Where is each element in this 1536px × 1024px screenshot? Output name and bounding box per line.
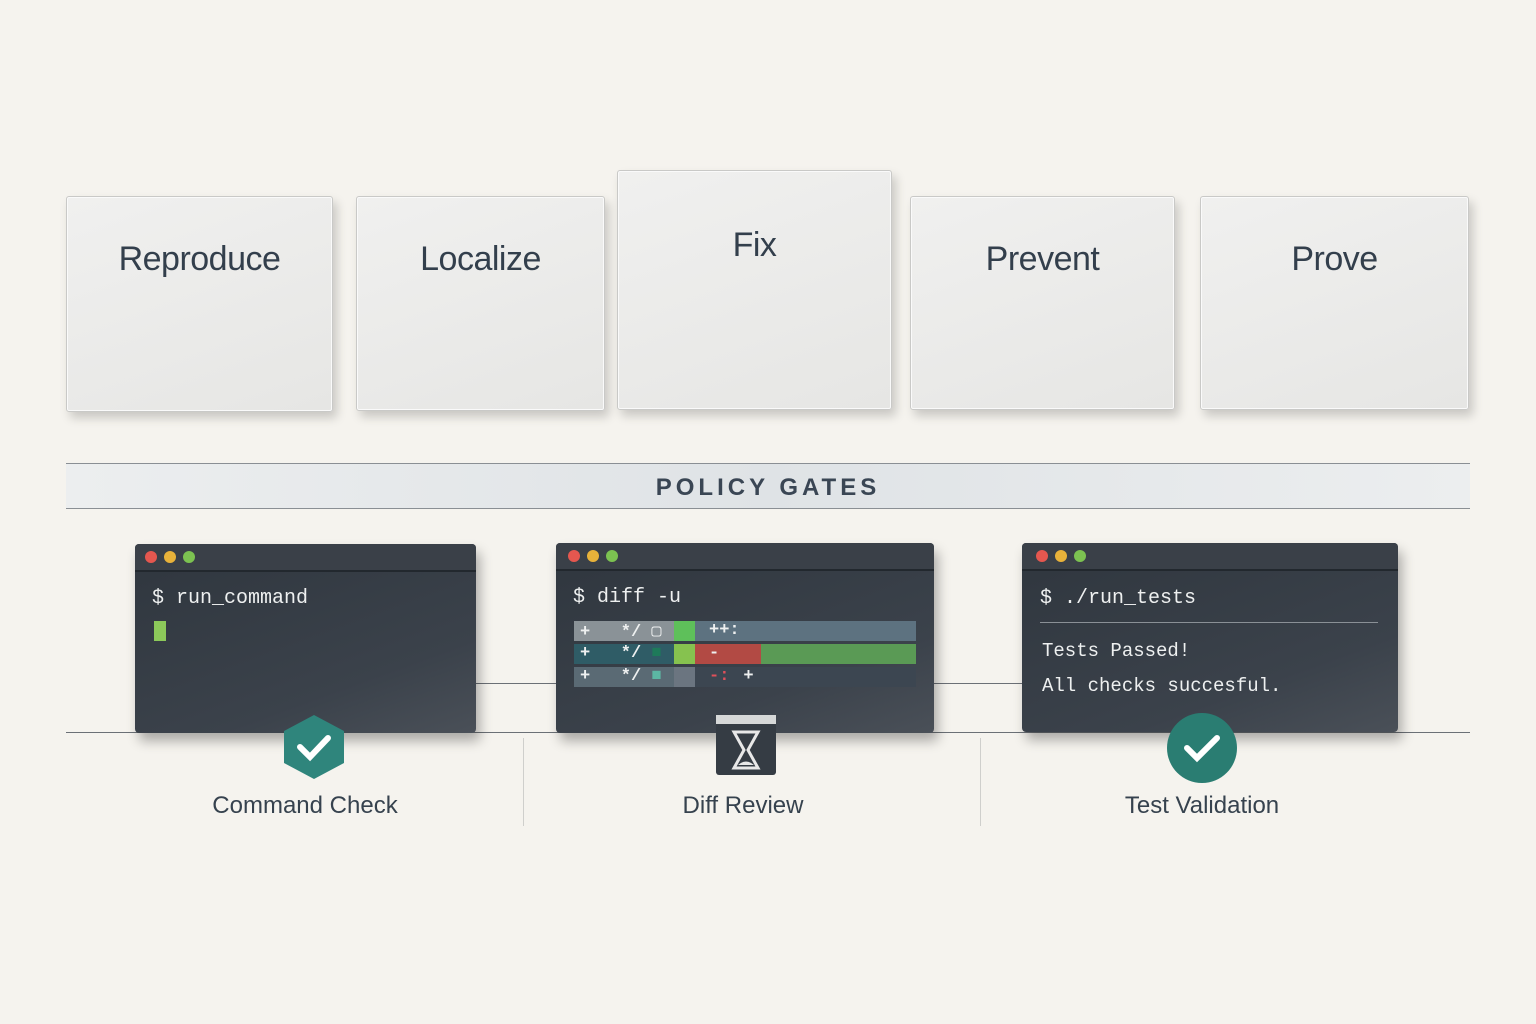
policy gates band: [66, 463, 1470, 509]
step card: Fix: [617, 170, 892, 410]
terminal: run_command: $ run_command: [152, 587, 308, 610]
baseline: [66, 732, 1470, 733]
icon: hourglass: [716, 715, 776, 775]
terminal: run_tests: All checks succesful.: [1042, 675, 1281, 697]
step card: Localize: [356, 196, 605, 411]
diff rows: ++:: [709, 621, 740, 640]
diff rows: -: [709, 644, 719, 663]
diff rows: + */ ■: [580, 667, 662, 686]
step card: Reproduce: [66, 196, 333, 412]
terminal: run_tests: Tests Passed!: [1042, 640, 1190, 662]
terminal: run_tests: $ ./run_tests: [1040, 587, 1196, 610]
diff rows: +: [743, 667, 754, 686]
diff rows: + */ ■: [580, 644, 662, 663]
step card: Prove: Prove: [1291, 240, 1378, 278]
label: Diff Review: Diff Review: [683, 792, 803, 819]
step card: Reproduce: Reproduce: [119, 240, 280, 278]
icon: hexagon check: [284, 715, 344, 779]
icon: circle check: [1167, 713, 1237, 783]
policy gates band: POLICY GATES: [656, 474, 880, 501]
terminal: diff: [556, 543, 934, 733]
step card: Prove: [1200, 196, 1469, 410]
step card: Fix: Fix: [733, 226, 776, 264]
diff rows: [574, 621, 916, 687]
step card: Prevent: [910, 196, 1175, 410]
label: Command Check: Command Check: [212, 792, 398, 819]
label: Test Validation: Test Validation: [1125, 792, 1279, 819]
diff rows: + */ ▢: [580, 623, 662, 642]
step card: Prevent: Prevent: [986, 240, 1099, 278]
diff rows: -:: [709, 667, 729, 686]
step card: Localize: Localize: [420, 240, 541, 278]
terminal: run_command: [135, 544, 476, 733]
terminal: diff: $ diff -u: [573, 586, 681, 609]
terminal: run_tests: [1022, 543, 1398, 732]
